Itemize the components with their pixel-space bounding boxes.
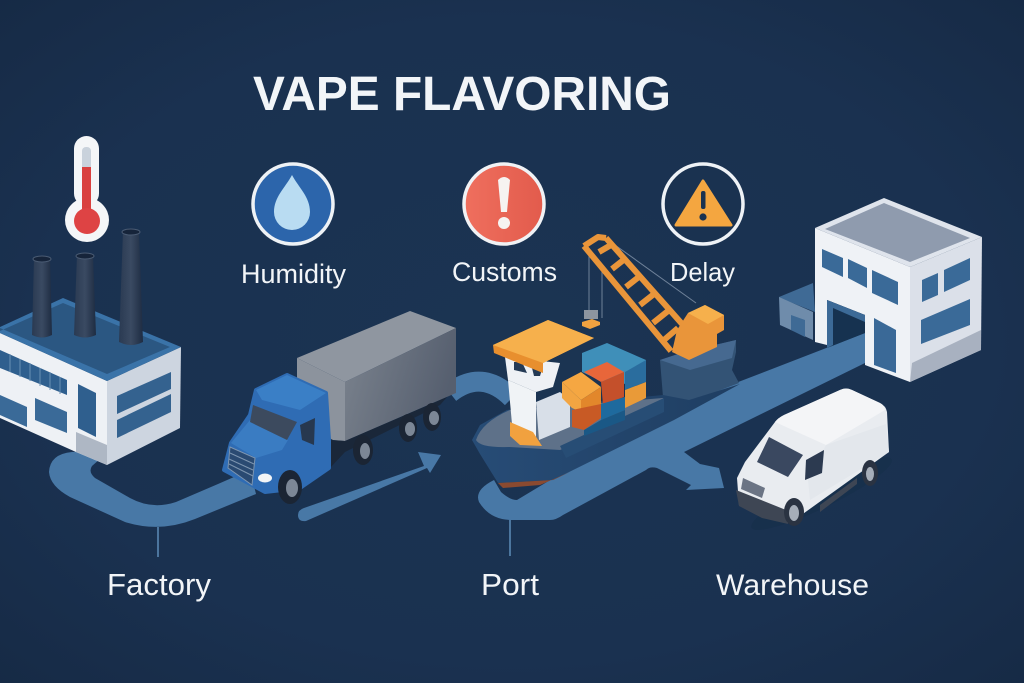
- warehouse left windows: [822, 249, 843, 277]
- rear wheels: [353, 435, 373, 465]
- factory label: Factory: [107, 567, 211, 602]
- grille: [228, 447, 255, 485]
- annex: [779, 283, 815, 312]
- crane cables: [589, 240, 696, 318]
- factory right windows: [117, 372, 171, 414]
- van rocker strip: [820, 478, 857, 512]
- factory right wall: [107, 347, 181, 465]
- title: VAPE FLAVORING: [253, 68, 671, 121]
- factory roof: [0, 298, 181, 381]
- arrow under truck: [298, 452, 441, 521]
- delay label: Delay: [670, 257, 735, 287]
- van: [736, 388, 898, 540]
- warehouse: [779, 198, 982, 382]
- factory door: [0, 395, 27, 427]
- side window: [300, 418, 315, 445]
- bow cargo: [510, 422, 542, 446]
- route: truck to ship: [450, 382, 512, 398]
- truck: [224, 311, 456, 504]
- deck: [476, 398, 663, 450]
- warehouse label: Warehouse: [716, 569, 869, 602]
- factory left wall: [0, 333, 107, 465]
- factory tall window: [78, 384, 96, 437]
- route: port to warehouse and van: [478, 333, 865, 520]
- factory lower windows: [35, 398, 67, 433]
- trailer undercarriage: [330, 397, 447, 468]
- bridge roof: [493, 320, 594, 373]
- factory base shadow: [76, 432, 107, 465]
- thermometer icon: [65, 136, 109, 242]
- van shadow: [745, 447, 898, 540]
- customs label: Customs: [452, 257, 557, 287]
- windshield: [250, 405, 297, 440]
- van windshield: [757, 437, 803, 477]
- ship: [472, 237, 740, 488]
- front wheel: [278, 470, 302, 504]
- humidity icon: [253, 164, 333, 244]
- crane cab: [672, 305, 724, 360]
- chimney right: [119, 231, 143, 345]
- crane hook load: [584, 310, 598, 319]
- delay icon: [663, 164, 743, 244]
- crane platform: [660, 340, 739, 402]
- warehouse right wall: [910, 237, 982, 382]
- van body: [737, 388, 889, 523]
- warehouse right windows: [922, 273, 938, 302]
- van grille and bumper: [736, 490, 788, 524]
- van side panel shade: [808, 424, 889, 500]
- side door: [874, 318, 896, 373]
- factory: [0, 229, 181, 465]
- hull: [472, 384, 740, 483]
- chimney middle: [74, 255, 96, 338]
- warehouse left wall: [815, 228, 910, 382]
- crane: [582, 237, 724, 360]
- van wheels: [784, 498, 804, 526]
- factory upper windows: [0, 350, 67, 395]
- cab hood: [231, 420, 288, 458]
- warehouse roof: [815, 198, 982, 267]
- factory connector line: [157, 527, 159, 557]
- bridge: [508, 380, 536, 440]
- headlight: [258, 474, 272, 482]
- containers: [582, 343, 646, 385]
- chimney left: [32, 258, 52, 338]
- customs icon: [464, 164, 544, 244]
- humidity label: Humidity: [241, 259, 346, 289]
- crane boom: [584, 237, 683, 351]
- hull keel stripe: [498, 472, 570, 488]
- port label: Port: [481, 567, 539, 602]
- trailer: [297, 358, 345, 441]
- loading door: [827, 300, 865, 348]
- van side window: [805, 450, 824, 480]
- cab: [224, 375, 329, 492]
- route: factory to truck: [49, 450, 256, 527]
- port connector line: [509, 520, 511, 556]
